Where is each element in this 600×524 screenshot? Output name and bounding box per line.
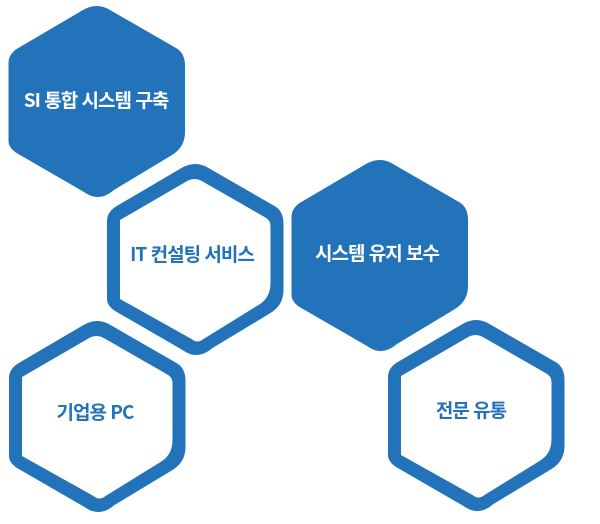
- hexagon: IT 컨설팅 서비스: [107, 164, 284, 355]
- hexagon: SI 통합 시스템 구축: SI 통합 시스템 구축: [24, 86, 169, 113]
- hexagon: 전문 유통: 전문 유통: [436, 396, 507, 423]
- hexagon: 기업용 PC: [9, 321, 186, 512]
- hexagon: SI 통합 시스템 구축: [8, 6, 185, 197]
- hexagon: 시스템 유지 보수: [292, 160, 468, 351]
- hexagon: IT 컨설팅 서비스: IT 컨설팅 서비스: [130, 240, 254, 267]
- hexagon: 시스템 유지 보수: 시스템 유지 보수: [315, 239, 440, 266]
- hexagon: 기업용 PC: 기업용 PC: [57, 398, 134, 425]
- hexagon: 전문 유통: [388, 320, 564, 511]
